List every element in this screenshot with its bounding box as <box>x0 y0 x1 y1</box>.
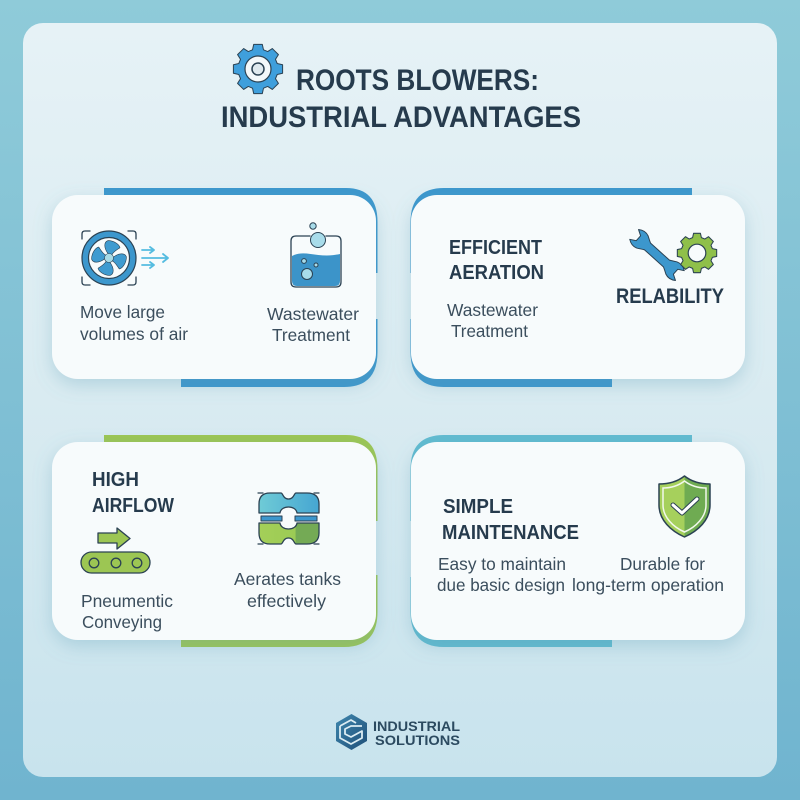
text: wastewater treatment <box>267 304 359 345</box>
card background <box>52 195 376 379</box>
icon: fan with airflow <box>82 231 168 285</box>
text: pneumatic conveying: Pneumentic <box>81 591 173 611</box>
text: easy to maintain: Easy to maintain <box>438 554 566 574</box>
text: aerates tanks effectively <box>234 569 341 611</box>
text: easy to maintain <box>437 554 566 595</box>
text: pneumatic conveying: Conveying <box>82 612 162 632</box>
text: company name <box>373 718 460 748</box>
heading: reliability: RELABILITY <box>616 285 724 308</box>
text: durable for long-term operation <box>572 554 724 595</box>
heading: high airflow: HIGH <box>92 469 139 491</box>
text: durable for long-term operation: Durable for <box>620 554 705 574</box>
text: move large volumes of air <box>80 302 188 344</box>
title: INDUSTRIAL ADVANTAGES <box>221 101 581 134</box>
icon: water tank <box>291 223 341 287</box>
icon: roots blower lobes <box>258 493 319 544</box>
footer logo <box>336 714 460 750</box>
text: company name: INDUSTRIAL <box>373 718 460 734</box>
heading: high airflow: AIRFLOW <box>92 495 174 517</box>
text: move large volumes of air: Move large <box>80 302 165 322</box>
text: wastewater treatment: Treatment <box>451 321 528 341</box>
text: wastewater treatment: Treatment <box>272 325 350 345</box>
text: wastewater treatment: Wastewater <box>267 304 359 324</box>
text: pneumatic conveying <box>81 591 173 632</box>
text: wastewater treatment: Wastewater <box>447 300 538 320</box>
text: move large volumes of air: volumes of air <box>80 324 188 344</box>
icon: hexagon logo <box>336 714 367 750</box>
text: aerates tanks effectively: Aerates tanks <box>234 569 341 589</box>
heading: efficient aeration: EFFICIENT <box>449 237 542 259</box>
panel: bottom-left card <box>52 435 378 647</box>
card background <box>52 442 376 640</box>
heading: simple maintenance <box>442 496 579 544</box>
panel: top-left card <box>52 188 378 387</box>
text: wastewater treatment <box>447 300 538 341</box>
heading: high airflow <box>92 469 174 517</box>
icon: wrench and gear <box>628 228 717 282</box>
text: durable for long-term operation: long-term operation <box>572 575 724 595</box>
card accent frame <box>410 188 692 387</box>
card background <box>411 442 745 640</box>
heading: efficient aeration <box>449 237 544 284</box>
panel: top-right card <box>410 188 745 387</box>
text: aerates tanks effectively: effectively <box>247 591 326 611</box>
heading: simple maintenance: SIMPLE <box>443 496 513 518</box>
card background <box>411 195 745 379</box>
card accent frame <box>410 435 692 647</box>
icon: shield with check <box>659 476 710 537</box>
card accent frame <box>104 188 378 387</box>
text: company name: SOLUTIONS <box>375 732 460 748</box>
icon: conveyor with arrow <box>81 528 150 573</box>
heading: efficient aeration: AERATION <box>449 262 544 284</box>
title: ROOTS BLOWERS: <box>296 64 539 97</box>
heading: simple maintenance: MAINTENANCE <box>442 522 579 544</box>
icon: header gear <box>233 44 283 94</box>
text: easy to maintain: due basic design <box>437 575 565 595</box>
card accent frame <box>104 435 378 647</box>
panel: bottom-right card <box>410 435 745 647</box>
title <box>221 64 581 134</box>
